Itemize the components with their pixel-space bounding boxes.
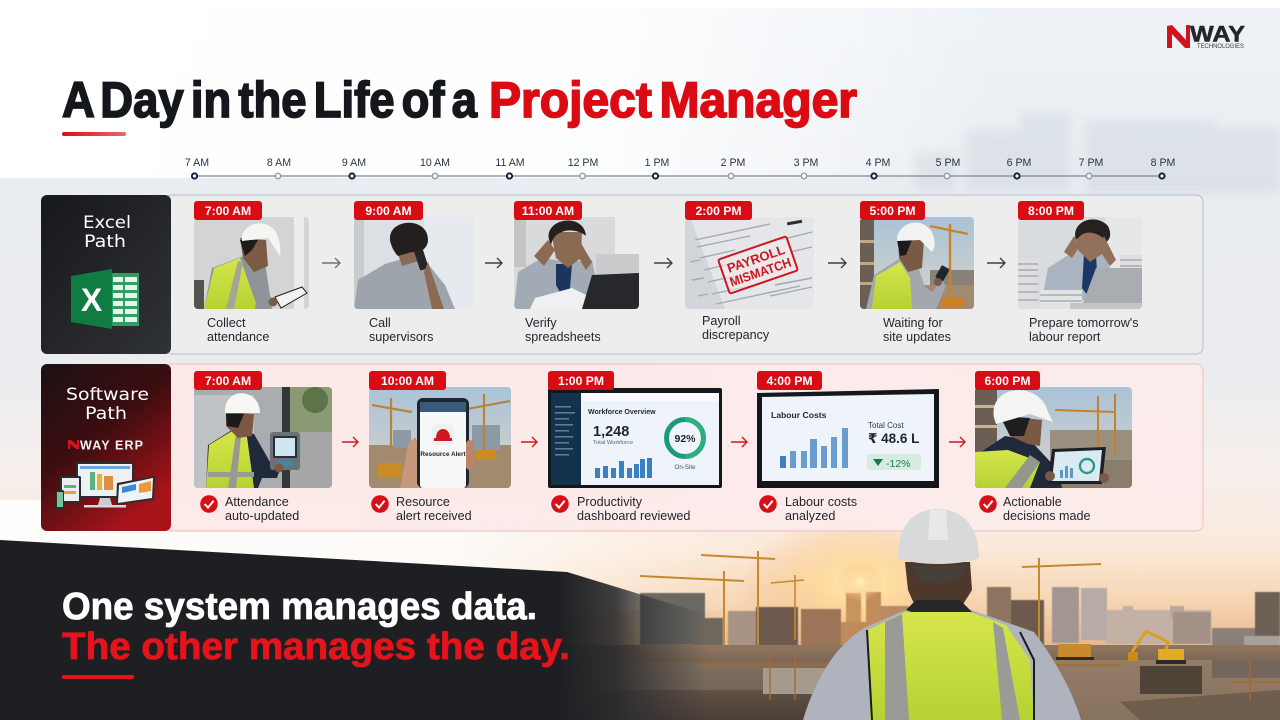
step: 4:00 PM labour costs: [757, 371, 939, 523]
timeline labels: 4 PM: [866, 157, 890, 169]
photo: labour cost dashboard: Labour Costs: [771, 410, 827, 420]
closing statement: One system manages data.: [62, 586, 537, 628]
caption: [785, 495, 857, 523]
timeline: [185, 157, 1175, 179]
photo: workforce dashboard: On-Site: [675, 464, 696, 471]
time badge: 5:00 PM: [869, 204, 916, 218]
caption: Waiting for: [883, 316, 943, 330]
caption: site updates: [883, 330, 951, 344]
step: 6:00 PM actionable decisions: [975, 371, 1132, 523]
Excel path label card: Path: [84, 232, 126, 252]
arrow: [485, 258, 502, 268]
step: 7:00 AM attendance auto-updated: [194, 371, 332, 523]
photo: workforce dashboard: 1,248: [593, 424, 629, 440]
photo: workforce dashboard: Total Workforce: [593, 440, 633, 446]
time badge: [194, 371, 262, 390]
caption: [1029, 316, 1138, 344]
step: 2:00 PM payroll discrepancy: [685, 201, 814, 342]
check icon: [200, 495, 218, 513]
photo: phone with resource alert on site: [369, 387, 511, 488]
step: 8:00 PM prepare labour report: [1018, 201, 1142, 344]
caption: Payroll: [702, 314, 740, 328]
construction site scene: [540, 514, 1280, 720]
step: 5:00 PM waiting for site updates: [860, 201, 974, 344]
caption: Actionable: [1003, 495, 1062, 509]
title: Project Manager: [489, 72, 857, 128]
time badge: 7:00 AM: [205, 204, 251, 218]
check icon: [371, 495, 389, 513]
closing underline: [62, 675, 134, 679]
caption: Resource: [396, 495, 450, 509]
time badge: [354, 201, 423, 220]
photo: worker with tablet: [975, 387, 1132, 488]
caption: analyzed: [785, 509, 835, 523]
caption: [525, 316, 601, 344]
caption: labour report: [1029, 330, 1101, 344]
caption: Verify: [525, 316, 557, 330]
time badge: [548, 371, 614, 390]
photo: worker with clipboard: [194, 217, 309, 309]
excavator: [1128, 631, 1186, 664]
timeline labels: 7 AM: [185, 157, 209, 169]
panel: Excel path: [41, 195, 1203, 354]
photo: payroll mismatch document: [685, 217, 814, 309]
caption: discrepancy: [702, 328, 770, 342]
icon: Excel logo: [71, 269, 139, 329]
caption: decisions made: [1003, 509, 1091, 523]
step: 1:00 PM productivity dashboard: [548, 371, 722, 523]
time badge: 4:00 PM: [766, 374, 813, 388]
project manager seen from behind: [803, 509, 1081, 720]
time badge: [685, 201, 752, 220]
caption: dashboard reviewed: [577, 509, 690, 523]
caption: Prepare tomorrow's: [1029, 316, 1138, 330]
step: 7:00 AM collect attendance: [194, 201, 309, 344]
timeline markers: [192, 173, 1165, 179]
title underline: [62, 132, 126, 136]
check icon: [759, 495, 777, 513]
step: 9:00 AM call supervisors: [354, 201, 474, 344]
photo: workforce dashboard: Workforce Overview: [588, 409, 656, 416]
arrow: [654, 258, 672, 268]
time badge: [757, 371, 822, 390]
photo: worker at biometric terminal: [194, 387, 332, 488]
timeline labels: 11 AM: [495, 157, 525, 169]
caption: Labour costs: [785, 495, 857, 509]
caption: [396, 495, 472, 523]
stamp: payroll mismatch: PAYROLL: [725, 242, 787, 276]
arrow: [949, 437, 965, 447]
timeline labels: 5 PM: [936, 157, 960, 169]
caption: [225, 495, 299, 523]
timeline labels: 9 AM: [342, 157, 366, 169]
caption: Collect: [207, 316, 246, 330]
faded skyline top right: [915, 112, 1280, 195]
photo: workforce dashboard: [548, 388, 722, 488]
logo: NWAY Technologies: WAY: [1190, 22, 1245, 46]
time badge: 9:00 AM: [365, 204, 412, 218]
time badge: 2:00 PM: [695, 204, 742, 218]
timeline labels: 2 PM: [721, 157, 745, 169]
icon: Excel logo: X: [81, 282, 103, 318]
photo: phone with resource alert on site: Resource Alert: [420, 451, 466, 458]
time badge: 1:00 PM: [558, 374, 604, 388]
time badge: 8:00 PM: [1028, 204, 1074, 218]
bulldozer: [1056, 644, 1094, 660]
time badge: 11:00 AM: [522, 204, 574, 218]
timeline labels: 1 PM: [645, 157, 669, 169]
icon: ERP devices: [56, 462, 155, 509]
time badge: 10:00 AM: [381, 374, 434, 388]
stamp: payroll mismatch: MISMATCH: [728, 255, 793, 290]
time badge: [1018, 201, 1084, 220]
arrow: [322, 258, 340, 268]
caption: [883, 316, 951, 344]
time badge: [975, 371, 1040, 390]
title: A Day in the Life of a: [62, 72, 478, 128]
timeline labels: 10 AM: [420, 157, 450, 169]
caption: Attendance: [225, 495, 289, 509]
step: 11:00 AM verify spreadsheets: [514, 201, 639, 344]
arrow: [987, 258, 1005, 268]
caption: attendance: [207, 330, 269, 344]
caption: Call: [369, 316, 391, 330]
arrow: [731, 437, 747, 447]
Software path label card: Software: [66, 385, 149, 405]
arrow: [521, 437, 537, 447]
Excel path label card: Excel: [83, 213, 131, 233]
caption: [369, 316, 433, 344]
photo: labour cost dashboard: -12%: [886, 458, 911, 470]
time badge: [860, 201, 925, 220]
timeline labels: 12 PM: [568, 157, 598, 169]
panel: Software path: [41, 364, 1203, 531]
logo: NWAY Technologies: [1167, 22, 1245, 50]
caption: Productivity: [577, 495, 643, 509]
caption: [207, 316, 269, 344]
arrow: [828, 258, 846, 268]
closing statement: The other manages the day.: [62, 626, 570, 668]
arrow: [342, 437, 358, 447]
time badge: 6:00 PM: [984, 374, 1031, 388]
timeline labels: 8 AM: [267, 157, 291, 169]
caption: [702, 314, 770, 342]
stamp: payroll mismatch: [718, 236, 798, 294]
title: [62, 72, 857, 128]
photo: workforce dashboard: 92%: [674, 433, 696, 445]
photo: man on phone: [354, 217, 474, 309]
timeline labels: 8 PM: [1151, 157, 1175, 169]
step: 10:00 AM resource alert received: [369, 371, 511, 523]
Software path label card: Path: [85, 404, 127, 424]
caption: supervisors: [369, 330, 433, 344]
caption: auto-updated: [225, 509, 299, 523]
time badge: 7:00 AM: [205, 374, 251, 388]
photo: man at laptop with paper stacks: [1018, 217, 1142, 309]
timeline labels: [185, 157, 1175, 169]
logo: NWAY Technologies: TECHNOLOGIES: [1197, 43, 1245, 50]
check icon: [551, 495, 569, 513]
timeline labels: 6 PM: [1007, 157, 1031, 169]
timeline labels: 3 PM: [794, 157, 818, 169]
caption: alert received: [396, 509, 472, 523]
caption: spreadsheets: [525, 330, 601, 344]
Excel path label card: [41, 195, 171, 354]
dark slanted panel: [0, 540, 708, 720]
photo: labour cost dashboard: [757, 389, 939, 488]
caption: [1003, 495, 1091, 523]
closing statement: [62, 586, 570, 668]
time badge: [514, 201, 582, 220]
photo: labour cost dashboard: ₹ 48.6 L: [868, 431, 919, 446]
time badge: [194, 201, 262, 220]
check icon: [979, 495, 997, 513]
NWAY ERP wordmark: WAY ERP: [80, 438, 143, 452]
photo: stressed man with laptop: [514, 217, 639, 309]
photo: worker checking phone on site: [860, 217, 974, 309]
caption: [577, 495, 690, 523]
Software path label card: [41, 364, 171, 531]
timeline labels: 7 PM: [1079, 157, 1103, 169]
photo: labour cost dashboard: Total Cost: [868, 421, 904, 430]
time badge: [369, 371, 446, 390]
